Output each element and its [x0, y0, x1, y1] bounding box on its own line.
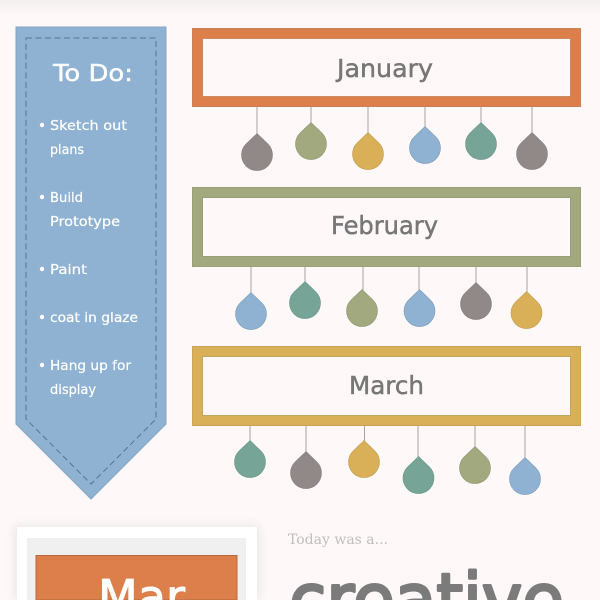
list: tasks: Build: [50, 191, 83, 206]
ornaments: march: [234, 426, 540, 495]
list: tasks: plans: [50, 143, 84, 158]
panel: february: [192, 188, 580, 330]
ornaments: january: [242, 107, 548, 171]
panel: march: [192, 346, 580, 495]
month label: february: February: [331, 211, 438, 240]
month label: january: January: [335, 54, 433, 83]
list: tasks: Hang up for: [50, 359, 132, 374]
list: tasks: [40, 119, 138, 398]
month label: march: March: [349, 371, 424, 400]
caption: today was a: Today was a...: [288, 532, 388, 548]
card: calendar date: [14, 525, 260, 600]
list: tasks: coat in glaze: [50, 311, 138, 326]
list: tasks: Sketch out: [50, 119, 127, 134]
list: tasks: display: [50, 383, 96, 398]
panel: january: [192, 28, 580, 171]
ornaments: february: [236, 267, 542, 330]
panel: to do banner: [16, 27, 166, 499]
list: tasks: Paint: [50, 263, 87, 278]
list: tasks: Prototype: [50, 215, 120, 230]
heading: to do: To Do:: [52, 61, 133, 87]
